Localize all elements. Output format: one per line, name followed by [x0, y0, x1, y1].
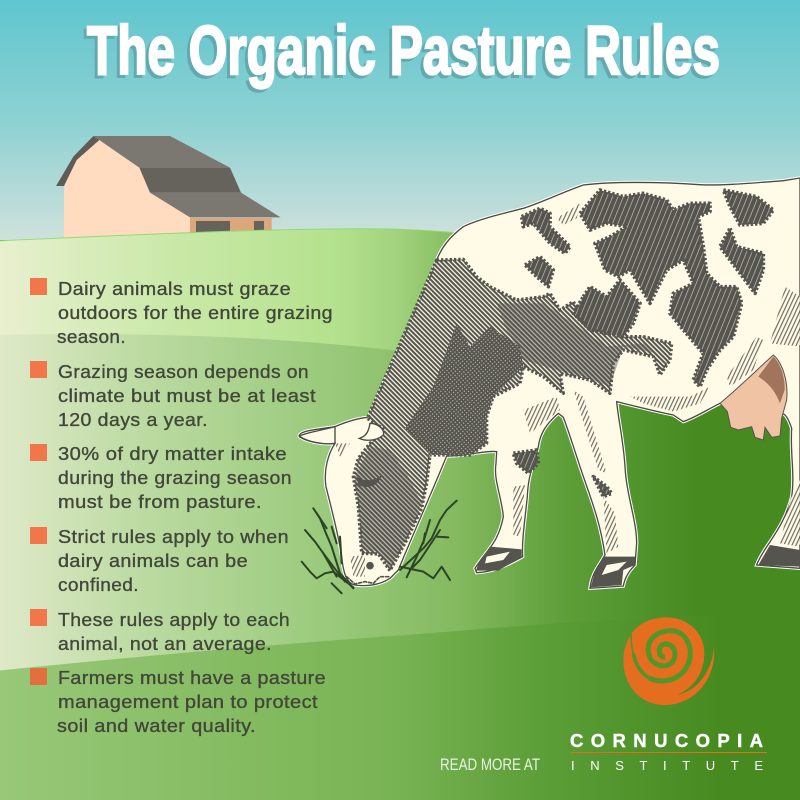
rule 3: must be from pasture.: [58, 491, 262, 512]
background: sky: [0, 0, 800, 240]
rule 2: [30, 361, 316, 430]
rule 3: 30% of dry matter intake: [58, 443, 287, 464]
rule 2: Grazing season depends on: [58, 361, 309, 382]
jaw mark: [357, 475, 382, 487]
rule 6: soil and water quality.: [57, 715, 256, 736]
ear and horn: [299, 423, 384, 444]
illustration: grazing cow: [299, 178, 800, 593]
grass tufts: [302, 501, 457, 593]
rule 1: Dairy animals must graze: [58, 278, 291, 299]
rule 6: [30, 667, 326, 736]
rule list: [30, 278, 333, 736]
rule 4: dairy animals can be: [58, 550, 248, 571]
rule 1: season.: [57, 326, 126, 347]
rule 5: [30, 609, 290, 654]
light hatching on flank, belly and legs: [335, 203, 800, 577]
rule 2: climate but must be at least: [58, 385, 316, 406]
rule 5: animal, not an average.: [58, 633, 272, 654]
logo: orange spiral: [623, 617, 714, 705]
cow body silhouette: [299, 178, 800, 588]
rule 6: management plan to protect: [58, 691, 318, 712]
dark overlay along shoulder: [497, 303, 657, 387]
large body spot: [580, 190, 742, 387]
rule 1: outdoors for the entire grazing: [58, 302, 333, 323]
cheek shadow: [355, 447, 422, 568]
shoulder spot: [573, 280, 640, 337]
icon: barn: [56, 136, 281, 241]
udder: [720, 355, 787, 440]
read more label: READ MORE AT: [440, 755, 540, 774]
rule 4: [30, 526, 289, 595]
logo: Cornucopia Institute wordmark: [570, 730, 767, 773]
rule 4: Strict rules apply to when: [58, 526, 289, 547]
cross-hatched shadow areas: [405, 323, 523, 455]
rule 6: Farmers must have a pasture: [58, 667, 326, 688]
small spots: [513, 190, 773, 497]
logo: Cornucopia Institute wordmark: INSTITUTE: [571, 758, 763, 773]
rule 1: [30, 278, 333, 347]
rule 2: 120 days a year.: [58, 409, 208, 430]
logo: Cornucopia Institute wordmark: CORNUCOPIA: [570, 730, 763, 751]
rule 3: during the grazing season: [58, 467, 292, 488]
hooves: [476, 545, 800, 587]
udder shading: [758, 357, 785, 403]
muzzle: [347, 563, 390, 584]
rule 3: [30, 443, 292, 512]
neck and shoulder hatching: [353, 259, 672, 571]
background: green pasture hills: [0, 229, 800, 800]
rule 5: These rules apply to each: [58, 609, 290, 630]
rule 4: confined.: [58, 574, 139, 595]
